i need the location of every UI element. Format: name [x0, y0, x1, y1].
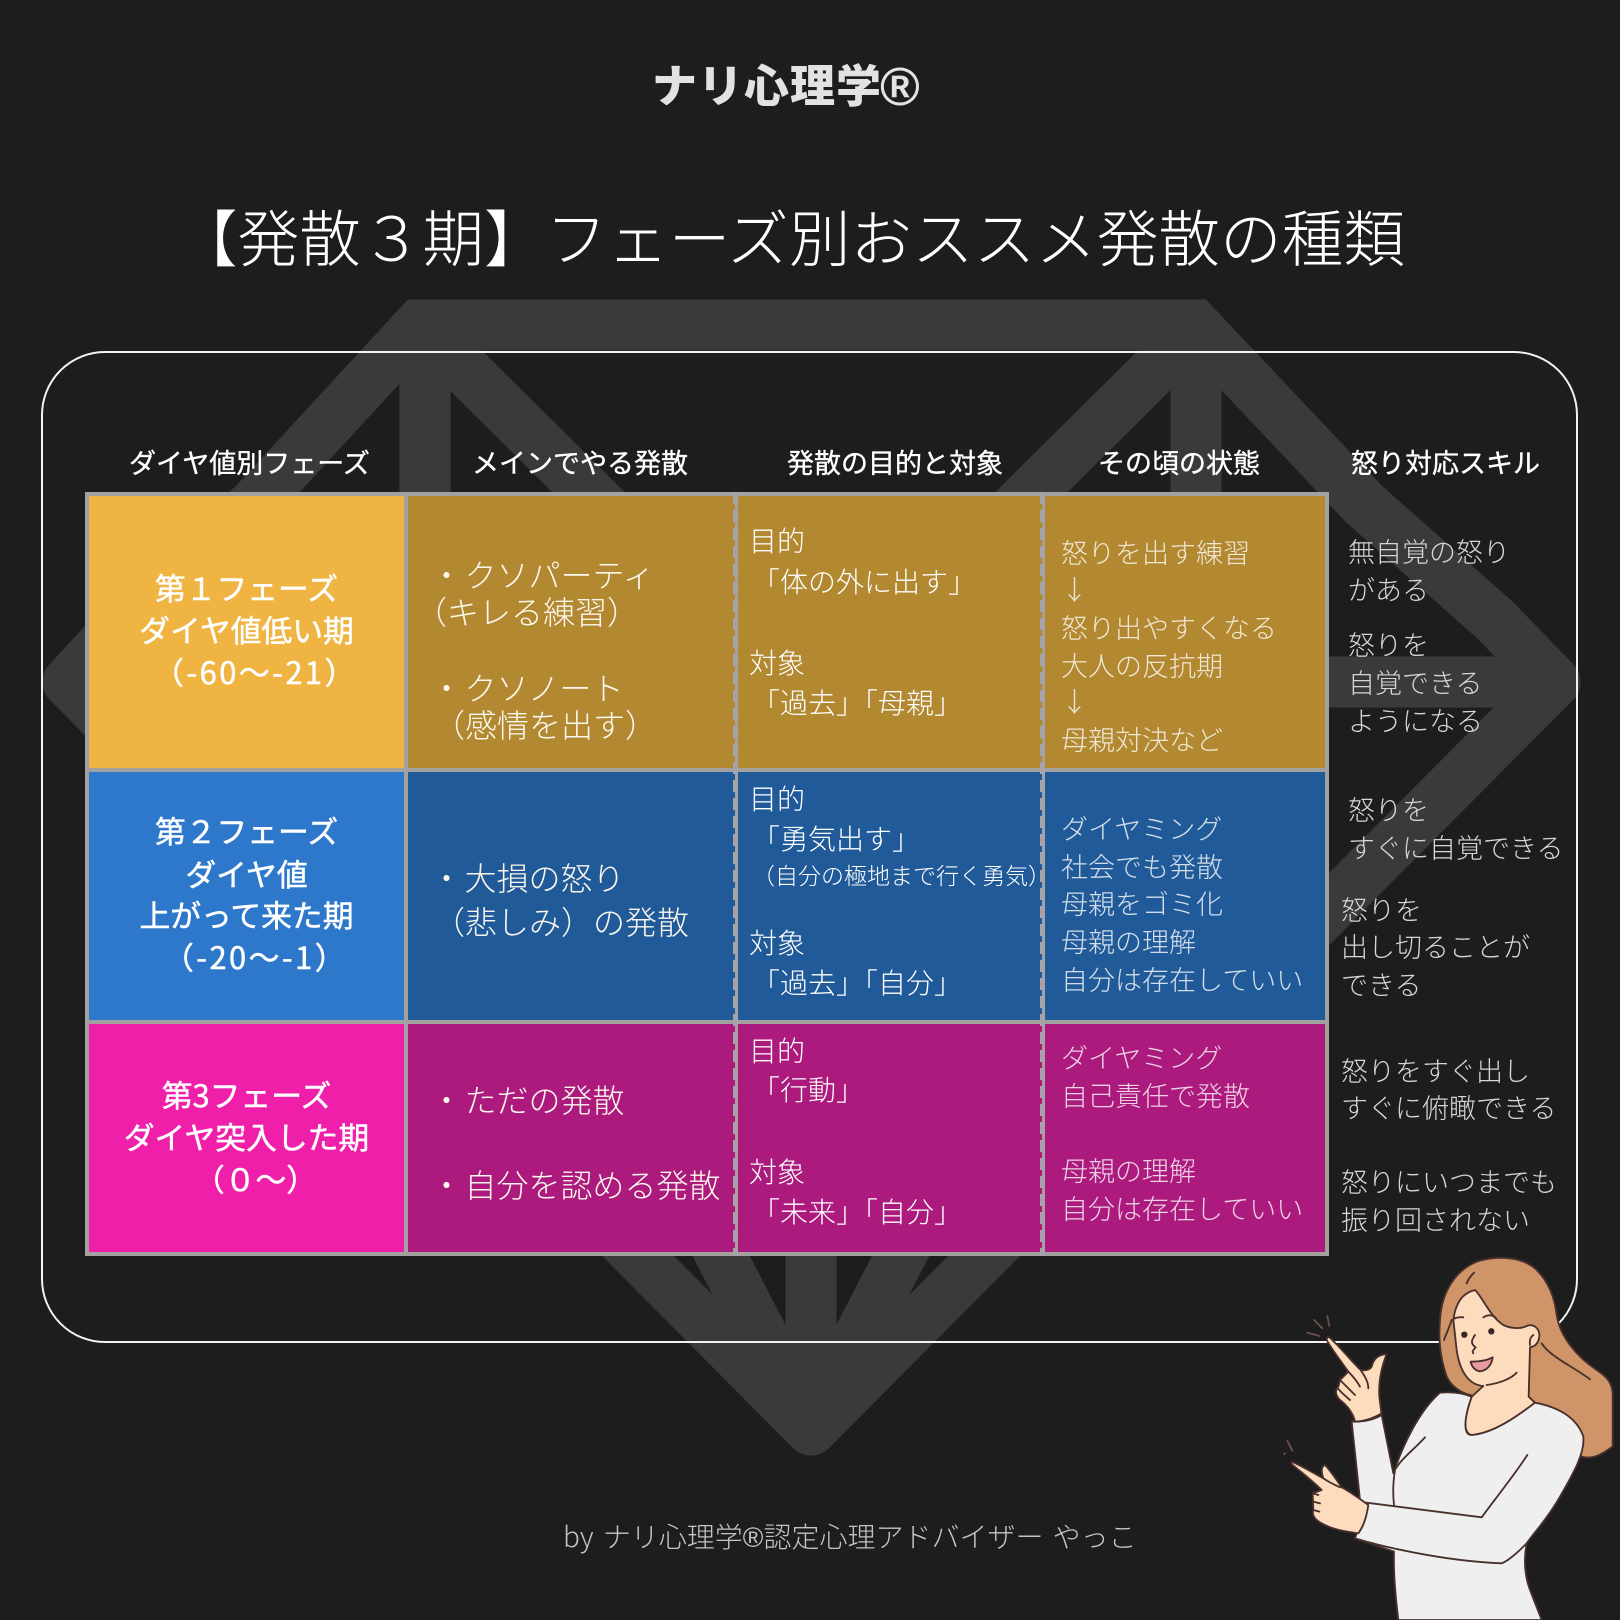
- row 1 main release cell: （キレる練習）: [415, 595, 639, 631]
- row 3 main release cell: [408, 1024, 735, 1252]
- row 1 purpose and target cell: 目的: [749, 526, 805, 557]
- row 3 phase cell: 第3フェーズ: [162, 1071, 331, 1116]
- row 3 phase cell: [89, 1024, 404, 1252]
- row 2 main release cell: ・大損の怒り: [430, 861, 625, 897]
- anger skills column: 怒りを: [1348, 796, 1429, 826]
- row 1 phase cell: [89, 496, 404, 768]
- anger skills column: 怒りを: [1348, 631, 1429, 661]
- row 1 purpose and target cell: 「体の外に出す」: [752, 567, 976, 598]
- row 3 state cell: 自己責任で発散: [1061, 1082, 1250, 1112]
- row 1 main release cell: ・クソパーティ: [430, 558, 655, 594]
- table column headers: 怒り対応スキル: [1351, 449, 1540, 479]
- anger skills column: 無自覚の怒り: [1348, 538, 1510, 568]
- row 2 phase cell: （-20～-1）: [163, 933, 348, 978]
- anger skills column: [1341, 538, 1563, 1236]
- row 2 state cell: ダイヤミング: [1061, 815, 1222, 845]
- row 1 purpose and target cell: [738, 496, 1042, 768]
- row 3 state cell: ダイヤミング: [1061, 1044, 1222, 1074]
- row 1 state cell: ↓: [1061, 569, 1088, 608]
- row 2 purpose and target cell: 対象: [749, 928, 805, 959]
- outer rounded frame: [41, 351, 1578, 1343]
- table column headers: その頃の状態: [1098, 449, 1260, 479]
- row 2 phase cell: 上がって来た期: [139, 891, 354, 936]
- logo: ナリ心理学®: [652, 50, 921, 117]
- row 3 state cell: 母親の理解: [1061, 1157, 1196, 1187]
- row 2 state cell: 社会でも発散: [1061, 853, 1223, 883]
- row 2 main release cell: （悲しみ）の発散: [433, 905, 689, 941]
- row 3 phase cell: ダイヤ突入した期: [124, 1113, 369, 1158]
- row 2 phase cell: [89, 772, 404, 1020]
- row 2 main release cell: [408, 772, 735, 1020]
- anger skills column: 怒りを: [1341, 896, 1422, 926]
- row 3 main release cell: ・自分を認める発散: [430, 1168, 721, 1204]
- row 2 purpose and target cell: [738, 772, 1042, 1020]
- row 3 purpose and target cell: 「未来」「自分」: [752, 1197, 962, 1228]
- row 2 purpose and target cell: 目的: [749, 784, 805, 815]
- anger skills column: すぐに俯瞰できる: [1341, 1094, 1556, 1124]
- row 3 purpose and target cell: 「行動」: [752, 1075, 864, 1106]
- row 3 state cell: 自分は存在していい: [1061, 1195, 1303, 1225]
- anger skills column: 怒りをすぐ出し: [1341, 1057, 1530, 1087]
- table column headers: 発散の目的と対象: [787, 449, 1003, 479]
- row 2 state cell: 自分は存在していい: [1061, 966, 1303, 996]
- row 1 state cell: 大人の反抗期: [1061, 652, 1223, 682]
- row 1 phase cell: （-60～-21）: [153, 648, 358, 693]
- table column headers: ダイヤ値別フェーズ: [129, 449, 370, 479]
- row 3 state cell: [1045, 1024, 1325, 1252]
- row 2 state cell: 母親の理解: [1061, 928, 1196, 958]
- row 2 phase cell: 第２フェーズ: [155, 806, 338, 852]
- anger skills column: すぐに自覚できる: [1348, 834, 1563, 864]
- row 1 purpose and target cell: 対象: [749, 648, 805, 679]
- anger skills column: ようになる: [1348, 707, 1483, 737]
- anger skills column: 振り回されない: [1341, 1206, 1530, 1236]
- anger skills column: できる: [1341, 971, 1421, 1001]
- row 1 main release cell: [408, 496, 735, 768]
- row 1 phase cell: 第１フェーズ: [155, 564, 338, 609]
- row 3 purpose and target cell: 対象: [749, 1157, 805, 1188]
- row 3 purpose and target cell: 目的: [749, 1036, 805, 1067]
- row 1 state cell: 怒り出やすくなる: [1061, 614, 1277, 644]
- row 1 state cell: 母親対決など: [1061, 726, 1223, 756]
- row 2 state cell: 母親をゴミ化: [1061, 890, 1223, 920]
- table grid background: [85, 492, 1329, 1256]
- table column headers: メインでやる発散: [472, 449, 688, 479]
- row 1 main release cell: （感情を出す）: [433, 708, 657, 744]
- row 2 purpose and target cell: 「勇気出す」: [752, 824, 920, 855]
- row 1 state cell: ↓: [1061, 681, 1088, 720]
- anger skills column: がある: [1348, 576, 1429, 606]
- row 1 phase cell: ダイヤ値低い期: [139, 606, 354, 651]
- row 1 purpose and target cell: 「過去」「母親」: [752, 688, 962, 719]
- anger skills column: 自覚できる: [1348, 669, 1482, 699]
- row 2 purpose and target cell: 「過去」「自分」: [752, 968, 962, 999]
- footer credit: by ナリ心理学®認定心理アドバイザー やっこ: [563, 1516, 1137, 1556]
- title: 【発散３期】フェーズ別おススメ発散の種類: [176, 206, 1405, 275]
- row 2 state cell: [1045, 772, 1325, 1020]
- anger skills column: 出し切ることが: [1341, 933, 1530, 963]
- row 2 phase cell: ダイヤ値: [185, 850, 308, 894]
- table column headers: [129, 449, 1540, 479]
- row 3 purpose and target cell: [738, 1024, 1042, 1252]
- row 3 main release cell: ・ただの発散: [430, 1083, 625, 1119]
- row 1 state cell: 怒りを出す練習: [1061, 539, 1250, 569]
- row 1 state cell: [1045, 496, 1325, 768]
- row 1 main release cell: ・クソノート: [430, 671, 624, 707]
- row 3 phase cell: （０～）: [194, 1155, 317, 1200]
- anger skills column: 怒りにいつまでも: [1341, 1168, 1557, 1198]
- illustration: pointing woman: [1283, 1256, 1614, 1620]
